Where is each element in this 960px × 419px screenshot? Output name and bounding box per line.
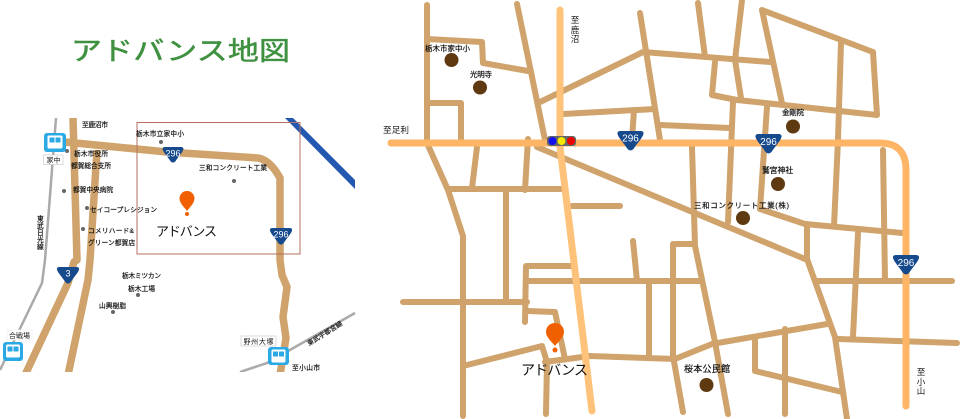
- station: Ienaka: 家中: [46, 156, 60, 164]
- route shield 296 east: [270, 228, 292, 245]
- direction: to Ashikaga: 至足利: [383, 124, 409, 135]
- route shield 296 west: [617, 131, 644, 150]
- route shield 3: [57, 267, 79, 284]
- place labels: 東武宇都宮線: [305, 319, 344, 348]
- place labels: 至小山市: [292, 363, 320, 372]
- station: Ienaka: [44, 133, 66, 164]
- route shield 296 center: 296: [760, 137, 777, 148]
- label: advance: アドバンス: [521, 362, 588, 378]
- route shield 296 east: 296: [898, 258, 915, 269]
- location pin: [180, 191, 194, 216]
- place labels: 三和コンクリート工業: [199, 163, 267, 172]
- traffic signal: [547, 136, 576, 146]
- route shield 296 center: [755, 134, 782, 154]
- direction: to Kanuma: 至: [571, 15, 580, 25]
- place labels: 栃木ミツカン: [122, 271, 161, 280]
- landmark labels: 三和コンクリート工業(株): [694, 200, 790, 210]
- station: Noshu-Otsuka: 野州大塚: [244, 337, 274, 346]
- location pin: [546, 323, 564, 352]
- place labels: 都賀中央病院: [73, 185, 113, 194]
- landmark labels: 栃木市家中小: [425, 43, 470, 53]
- place labels: コメリハード&: [88, 227, 135, 235]
- landmark dots: [62, 140, 236, 314]
- route shield 296 east: 296: [273, 230, 289, 240]
- station: Noshu-Otsuka: [241, 336, 289, 365]
- place labels: 至鹿沼市: [82, 120, 108, 129]
- panel: detail map: [383, 0, 957, 419]
- highlight frame: [137, 122, 300, 254]
- direction: to Oyama: 至: [917, 367, 926, 377]
- landmark labels: 光明寺: [470, 69, 492, 79]
- landmark markers: [444, 53, 800, 392]
- station: Kassenba: 合戦場: [9, 331, 30, 340]
- route shield 296 west: 296: [622, 134, 639, 144]
- place labels: 日: [37, 229, 44, 237]
- road to Kanuma: [560, 10, 592, 411]
- place labels: 東: [37, 214, 44, 223]
- place labels: 武: [37, 221, 44, 230]
- route shield 3: 3: [65, 268, 71, 278]
- place labels: グリーン都賀店: [88, 238, 135, 247]
- direction: to Oyama: 小: [917, 377, 926, 387]
- route shield 296 north: [163, 147, 183, 163]
- place labels: 栃木工場: [128, 284, 155, 293]
- direction: to Kanuma: 鹿: [571, 25, 580, 35]
- roads: [25, 118, 287, 375]
- railway: Tobu Utsunomiya line: [240, 313, 355, 372]
- direction: to Kanuma: 沼: [571, 34, 579, 44]
- landmark labels: 鷲宮神社: [762, 165, 793, 175]
- place labels: [37, 120, 344, 372]
- railway: Tobu Nikko line: [0, 118, 56, 370]
- route 296 main road: [391, 143, 906, 406]
- route shield 296 north: 296: [165, 148, 181, 158]
- label: advance: アドバンス: [156, 224, 217, 239]
- local roads: [403, 0, 957, 419]
- place labels: 山興樹脂: [99, 301, 126, 310]
- place labels: 光: [37, 235, 44, 244]
- place labels: セイコープレシジョン: [90, 206, 157, 214]
- panel: area map: [0, 118, 355, 375]
- landmark labels: 金剛院: [782, 107, 804, 117]
- station: Kassenba: [3, 330, 32, 361]
- landmark labels: 桜本公民館: [684, 363, 730, 374]
- direction: to Oyama: 山: [917, 386, 925, 396]
- title: アドバンス地図: [71, 37, 290, 66]
- place labels: 栃木市役所: [74, 149, 108, 158]
- place labels: 線: [37, 242, 44, 251]
- place labels: 都賀総合支所: [71, 161, 111, 170]
- place labels: 栃木市立家中小: [136, 129, 184, 138]
- landmark labels: [425, 43, 804, 374]
- route shield 296 east: [893, 255, 919, 274]
- expressway: [285, 118, 355, 189]
